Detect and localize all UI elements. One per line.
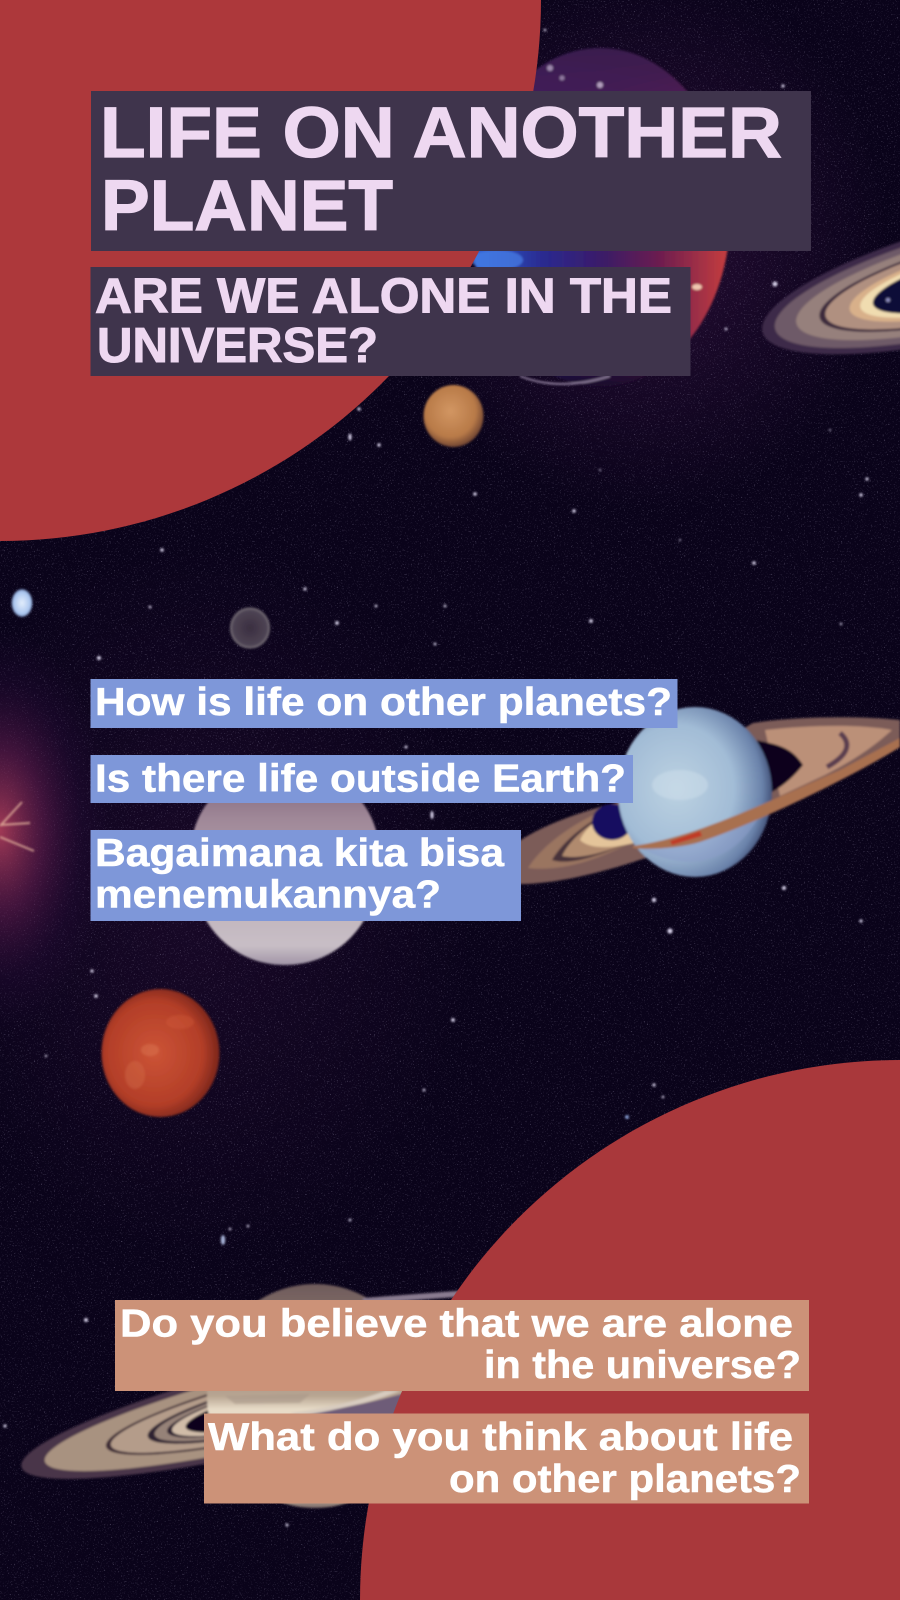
question text: Is there life outside Earth?: [95, 758, 626, 800]
callout: are we alone: [115, 1300, 809, 1391]
red quarter circle top left: [0, 0, 541, 541]
planet: small orange: [424, 385, 484, 447]
title line 2: PLANET: [101, 166, 393, 246]
ring bands right: [765, 726, 892, 796]
planet: ringed top right: [748, 156, 900, 388]
planet: red: [102, 989, 220, 1117]
question: life on other planets: [90, 679, 678, 728]
ring hole left: [592, 804, 632, 840]
callout panel: [115, 1300, 809, 1391]
subtitle line 2: UNIVERSE?: [97, 319, 378, 373]
question panel: [90, 755, 633, 803]
planet body: [207, 1284, 423, 1508]
question: life outside Earth: [90, 755, 633, 803]
callout line 1: Do you believe that we are alone: [120, 1302, 793, 1346]
title line 1: LIFE ON ANOTHER: [100, 93, 782, 173]
question line 2: menemukannya?: [95, 874, 441, 916]
subtitle panel: [90, 267, 690, 376]
planet: ringed bottom left: [11, 1282, 619, 1510]
planet surface mottling: [225, 1394, 310, 1404]
callout panel: [204, 1414, 809, 1504]
question line 1: Bagaimana kita bisa: [95, 832, 504, 875]
ring back stripe: [363, 1290, 470, 1304]
ring front strip: [633, 738, 900, 849]
sun glow at left edge: [0, 630, 110, 1030]
planet: blue with ring: [498, 707, 900, 884]
ring: [11, 1282, 619, 1510]
planet: large blue and red behind title: [470, 48, 730, 386]
question: bagaimana: [90, 830, 521, 921]
question panel: [90, 679, 678, 728]
moon: gray: [230, 608, 270, 648]
title: [91, 91, 811, 251]
callout line 2: on other planets?: [449, 1458, 801, 1501]
subtitle: [90, 267, 690, 376]
ring front stripes: [290, 1389, 420, 1416]
question panel: [90, 830, 521, 921]
subtitle line 1: ARE WE ALONE IN THE: [95, 270, 672, 324]
question text: How is life on other planets?: [95, 681, 672, 724]
ring bands left: [528, 803, 635, 869]
red quarter circle bottom right: [360, 1060, 900, 1600]
planet body: [618, 707, 772, 877]
callout line 2: in the universe?: [484, 1344, 801, 1387]
ring: [498, 717, 900, 884]
ring hole right: [757, 740, 803, 792]
callout line 1: What do you think about life: [208, 1416, 793, 1459]
planet: pale pink: [190, 770, 380, 965]
callout: what do you think: [204, 1414, 809, 1504]
moon: small white: [12, 589, 32, 617]
title panel: [91, 91, 811, 251]
